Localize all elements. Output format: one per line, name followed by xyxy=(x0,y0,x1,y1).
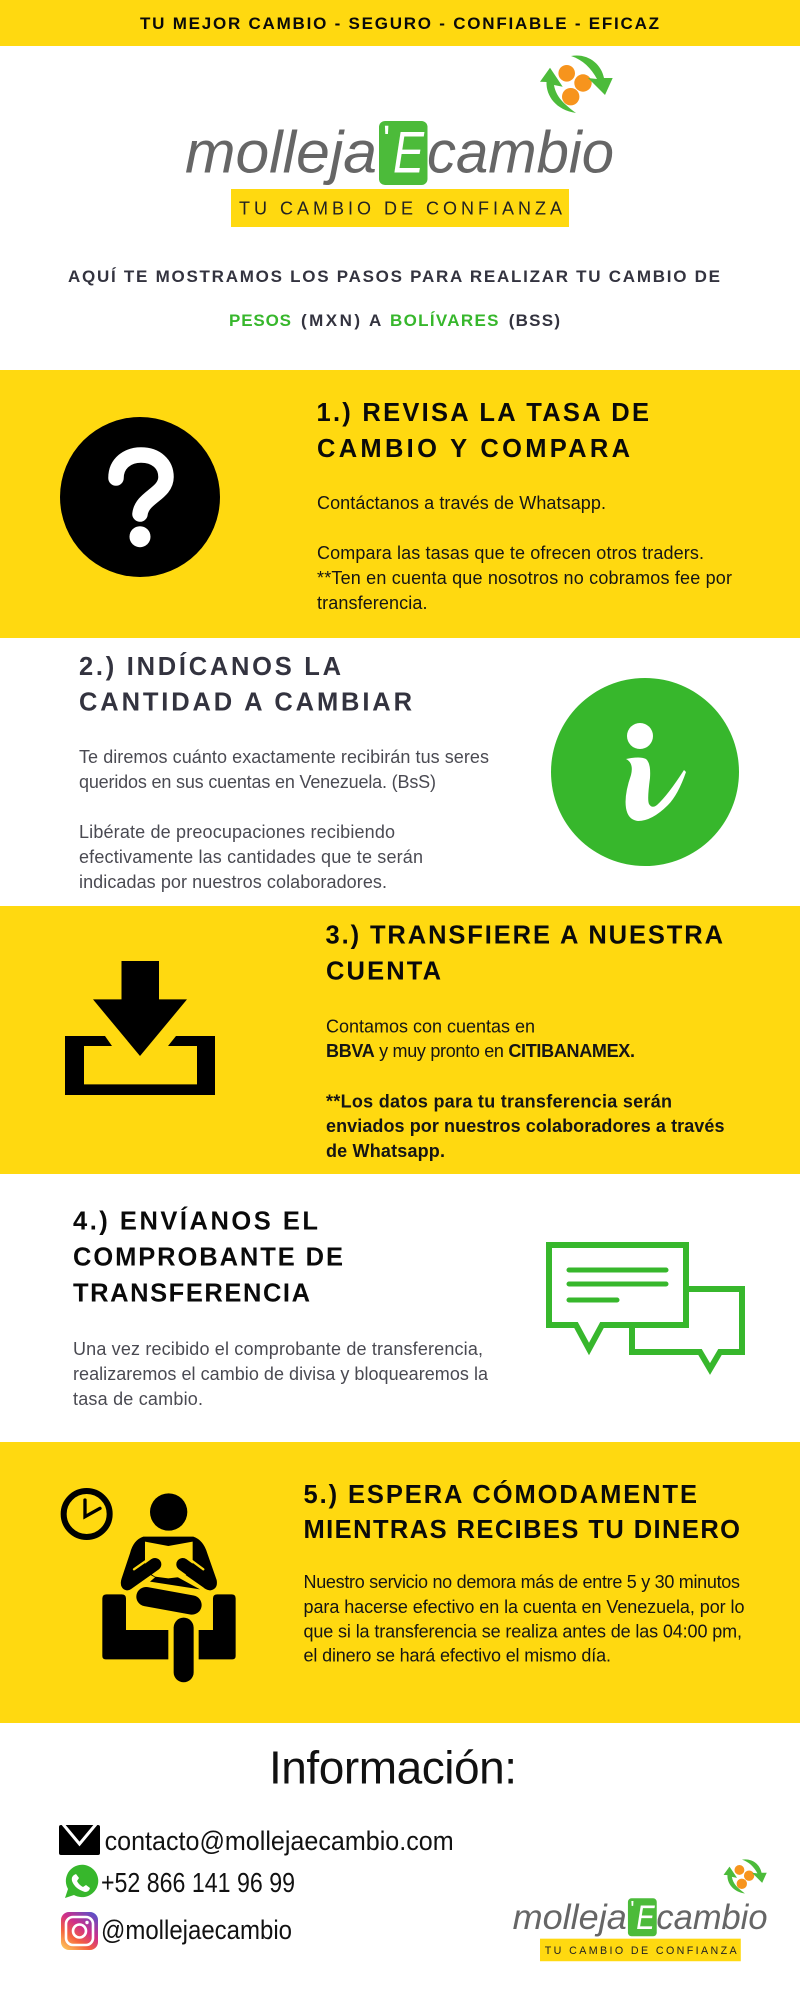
intro text: (MXN) xyxy=(301,311,360,330)
heading: step 2: 2.) INDÍCANOS LA xyxy=(79,652,341,681)
text: step 5: el dinero se hará efectivo el mismo día. xyxy=(304,1646,611,1666)
panel: step 3 xyxy=(0,906,800,1174)
top banner xyxy=(0,0,800,46)
small logo: ' xyxy=(630,1897,635,1922)
logo wordmark: ' xyxy=(383,119,390,161)
contact: instagram: @mollejaecambio xyxy=(101,1915,292,1945)
icon: whatsapp xyxy=(65,1865,98,1898)
text: step 1: transferencia. xyxy=(317,593,428,613)
heading: step 1: CAMBIO Y COMPARA xyxy=(317,435,630,463)
text: step 2: Te diremos cuánto exactamente recibirán tus seres xyxy=(79,747,489,767)
heading: step 2 xyxy=(79,652,412,717)
logo xyxy=(185,55,614,227)
logo wordmark: E xyxy=(393,120,425,186)
panel: step 1 xyxy=(0,370,800,638)
heading: step 4: 4.) ENVÍANOS EL xyxy=(73,1207,318,1236)
text: step 5: que si la transferencia se realiza antes de las 04:00 pm, xyxy=(304,1622,742,1642)
contact: email: contacto@mollejaecambio.com xyxy=(105,1826,454,1856)
intro text: BOLÍVARES xyxy=(390,311,498,330)
heading: step 1: 1.) REVISA LA TASA DE xyxy=(316,399,649,427)
icon: person waiting with clock xyxy=(64,1491,236,1672)
small logo: molleja xyxy=(513,1898,627,1937)
contact: phone: +52 866 141 96 99 xyxy=(101,1867,295,1898)
heading: step 1 xyxy=(316,399,649,463)
text: step 3: BBVA y muy pronto en CITIBANAMEX. xyxy=(326,1041,635,1061)
text: step 3: **Los datos para tu transferencia serán xyxy=(326,1092,672,1112)
small logo xyxy=(513,1859,768,1961)
top banner: TU MEJOR CAMBIO - SEGURO - CONFIABLE - EFICAZ xyxy=(140,14,659,33)
text: step 4 xyxy=(73,1339,489,1409)
text: step 4: tasa de cambio. xyxy=(73,1389,203,1409)
logo tagline: TU CAMBIO DE CONFIANZA xyxy=(239,198,562,218)
text: step 3: de Whatsapp. xyxy=(326,1141,445,1161)
heading: información: Información: xyxy=(269,1742,517,1794)
contact: phone xyxy=(65,1865,295,1898)
heading: step 5: MIENTRAS RECIBES TU DINERO xyxy=(304,1516,740,1544)
text: step 2: Libérate de preocupaciones recibiendo xyxy=(79,822,395,842)
heading: step 5: 5.) ESPERA CÓMODAMENTE xyxy=(304,1479,697,1509)
heading: step 3: CUENTA xyxy=(326,957,441,985)
text: step 1: **Ten en cuenta que nosotros no cobramos fee por xyxy=(317,568,732,588)
text: step 3: Contamos con cuentas en xyxy=(326,1016,535,1036)
intro text: AQUÍ TE MOSTRAMOS LOS PASOS PARA REALIZAR TU CAMBIO DE xyxy=(68,267,720,286)
logo wordmark xyxy=(185,119,614,186)
heading: step 3: 3.) TRANSFIERE A NUESTRA xyxy=(326,922,723,950)
icon: question mark xyxy=(60,417,220,577)
intro text: PESOS xyxy=(229,311,291,330)
small logo: cambio xyxy=(656,1898,768,1937)
heading: step 4: TRANSFERENCIA xyxy=(73,1280,310,1308)
logo tagline xyxy=(231,189,569,227)
icon: chat bubbles xyxy=(549,1245,742,1369)
text: step 2: queridos en sus cuentas en Venezuela. (BsS) xyxy=(79,772,436,792)
text: step 3: enviados por nuestros colaboradores a través xyxy=(326,1116,724,1136)
icon: exchange arrows and coins xyxy=(540,55,613,113)
heading: step 4 xyxy=(73,1207,343,1308)
text: step 4: Una vez recibido el comprobante de transferencia, xyxy=(73,1339,483,1359)
intro text: A xyxy=(369,311,381,330)
icon: instagram xyxy=(61,1912,98,1950)
small logo: E xyxy=(636,1899,655,1937)
panel: step 2 xyxy=(79,652,739,892)
icon: envelope xyxy=(59,1823,100,1855)
text: step 2: efectivamente las cantidades que te serán xyxy=(79,847,423,867)
text: step 5 xyxy=(304,1572,744,1666)
small logo: TU CAMBIO DE CONFIANZA xyxy=(545,1945,737,1957)
heading: step 2: CANTIDAD A CAMBIAR xyxy=(79,689,412,717)
heading: step 3 xyxy=(326,922,723,985)
intro text: (BSS) xyxy=(509,311,560,330)
icon: information xyxy=(551,678,739,866)
panel: step 4 xyxy=(73,1207,742,1409)
intro text xyxy=(68,267,720,330)
text: step 5: Nuestro servicio no demora más de entre 5 y 30 minutos xyxy=(304,1572,740,1592)
text: step 5: para hacerse efectivo en la cuenta en Venezuela, por lo xyxy=(304,1597,744,1617)
heading: step 4: COMPROBANTE DE xyxy=(73,1244,343,1272)
contact: instagram xyxy=(61,1912,292,1950)
text: step 3 xyxy=(326,1016,724,1161)
icon: download tray xyxy=(65,961,215,1095)
text: step 1: Contáctanos a través de Whatsapp. xyxy=(317,493,606,513)
logo wordmark: cambio xyxy=(427,120,614,186)
text: step 2 xyxy=(79,747,489,892)
text: step 1 xyxy=(317,493,732,613)
text: step 1: Compara las tasas que te ofrecen otros traders. xyxy=(317,543,704,563)
panel: step 5 xyxy=(0,1442,800,1723)
heading: step 5 xyxy=(304,1479,740,1544)
text: step 2: indicadas por nuestros colaboradores. xyxy=(79,872,387,892)
text: step 4: realizaremos el cambio de divisa y bloquearemos la xyxy=(73,1364,489,1384)
logo wordmark: molleja xyxy=(185,120,377,186)
